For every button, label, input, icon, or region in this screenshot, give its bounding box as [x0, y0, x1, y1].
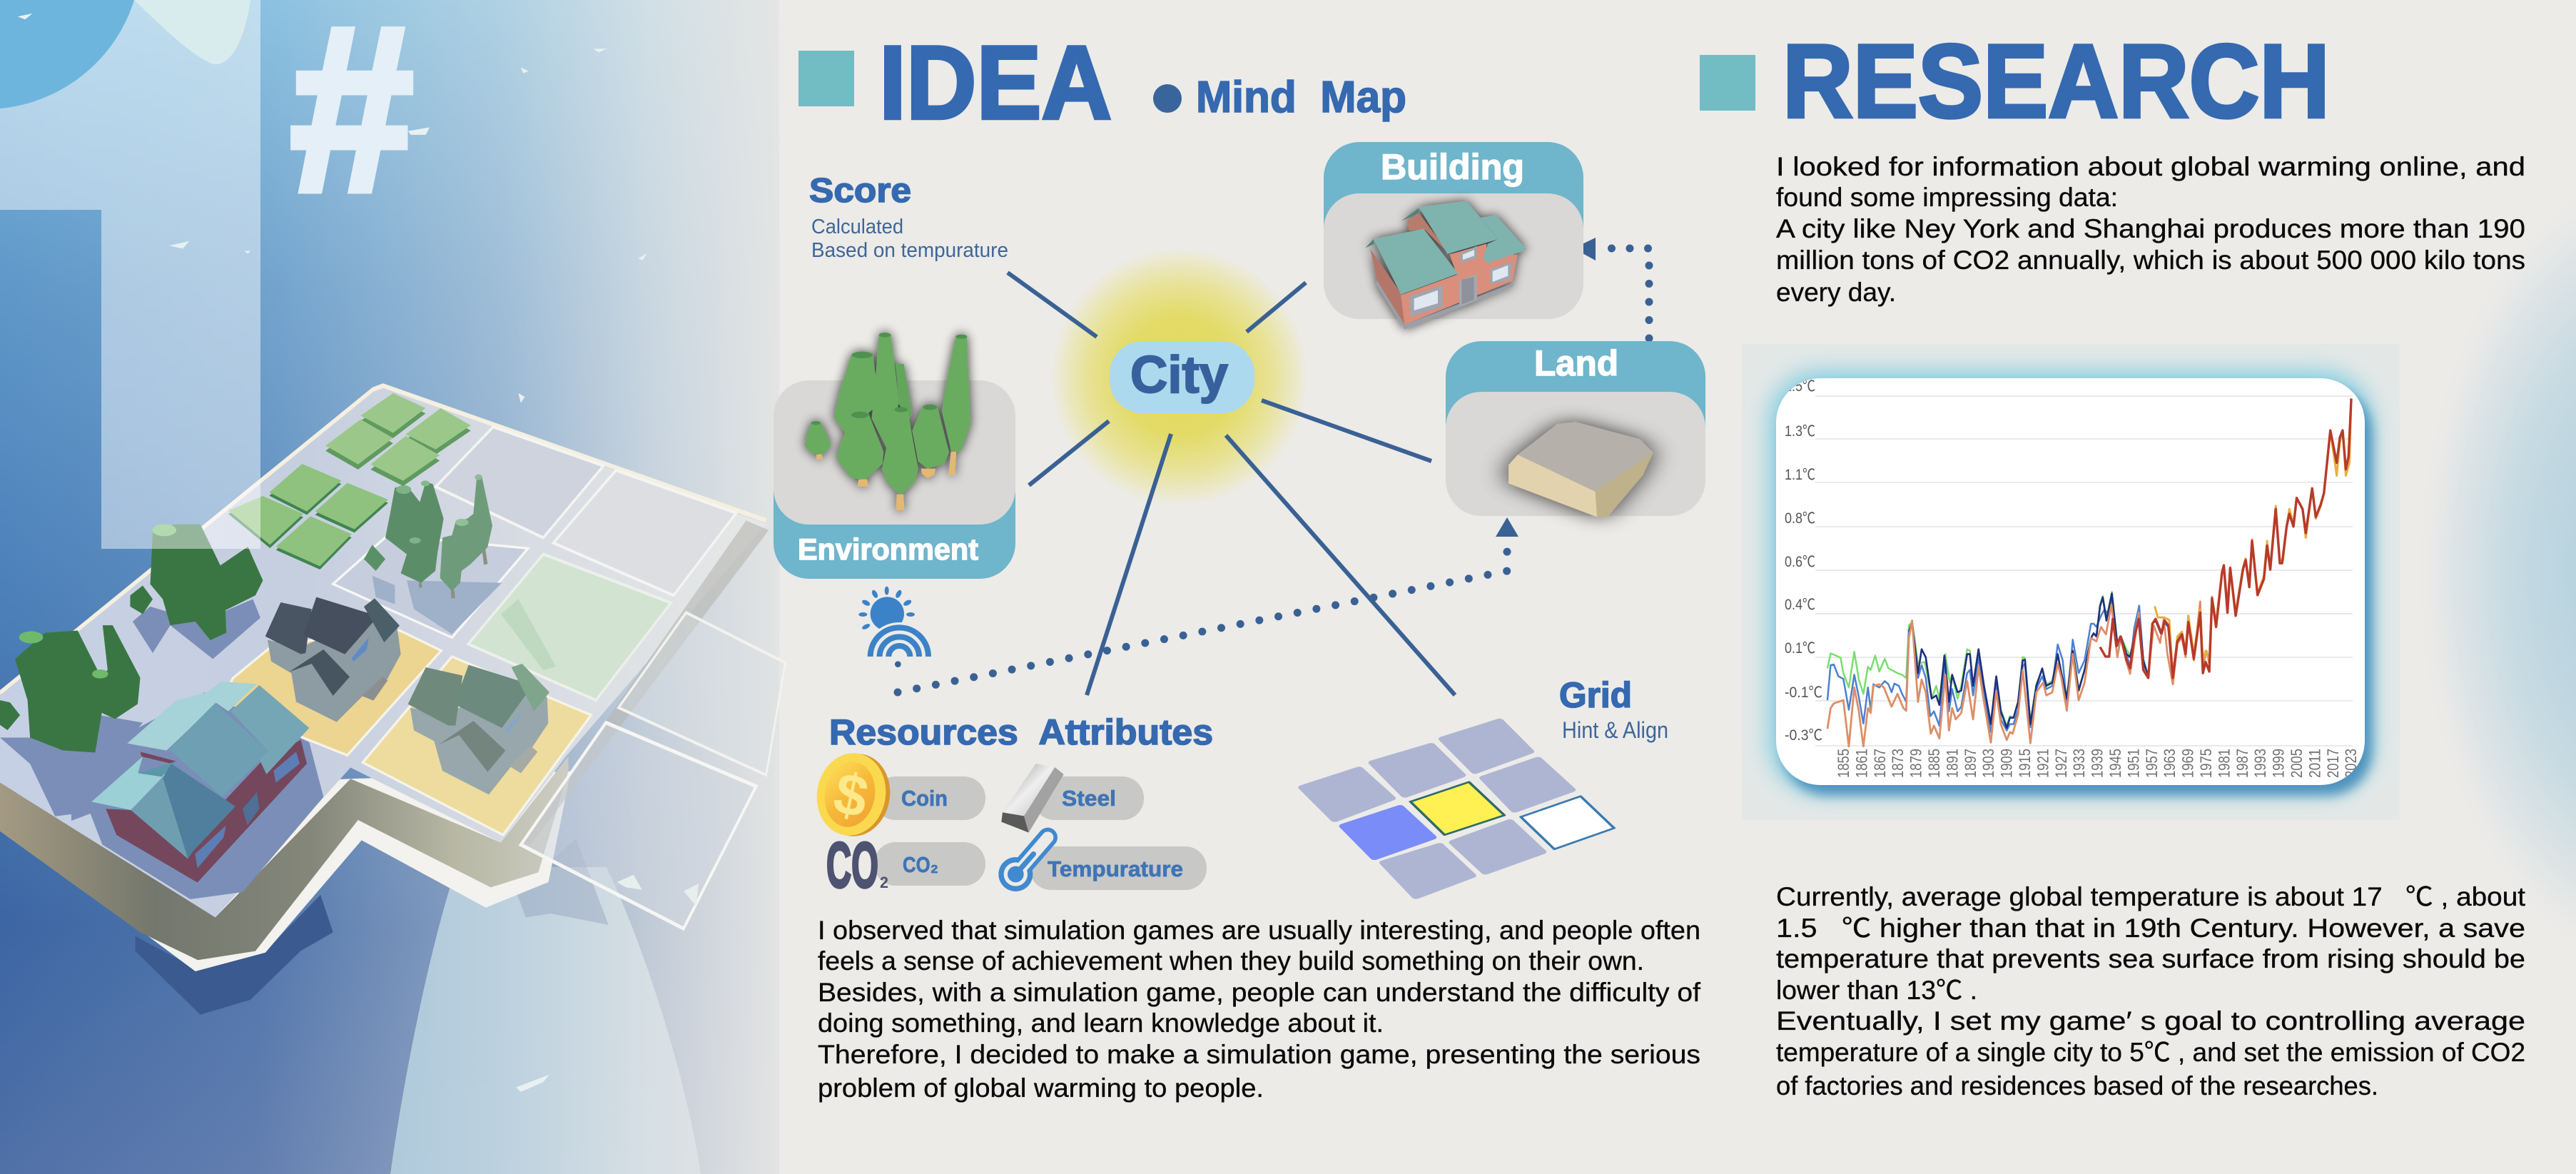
icon: CO2: CO [826, 830, 878, 901]
x axis labels: 1927 [2052, 749, 2070, 778]
text block: research intro: every day. [1776, 278, 1896, 307]
node: score: Score [809, 172, 911, 210]
temperature series [1827, 398, 2351, 747]
x axis labels: 2005 [2288, 749, 2306, 778]
x axis labels: 1939 [2089, 749, 2106, 778]
text block: research intro: found some impressing data: [1776, 183, 2118, 212]
pill: steel: Steel [1062, 786, 1116, 811]
text block: research intro: A city like Ney York and Shanghai produces more than 190 [1776, 214, 2525, 243]
x axis labels: 1903 [1979, 749, 1997, 778]
subheading: mind map: Mind Map [1196, 73, 1406, 122]
node: building: Building [1381, 147, 1524, 187]
x axis labels: 1897 [1962, 749, 1979, 778]
node: environment: Environment [798, 532, 978, 566]
node: grid: Hint & Align [1562, 717, 1668, 743]
y axis labels: 1.1℃ [1785, 467, 1815, 483]
upper farm plots [325, 393, 471, 486]
x axis labels: 1861 [1852, 749, 1870, 778]
pale house [408, 664, 549, 794]
text block: research conclusions: of factories and residences based of the researches. [1776, 1071, 2378, 1100]
middle trees [364, 475, 492, 598]
pill: steel [1033, 776, 1144, 820]
node: score: Based on tempurature [811, 239, 1008, 262]
pill: carbon dioxide [874, 842, 985, 886]
text block: research conclusions: 1.5 ℃ higher than that in 19th Century. However, a save [1776, 914, 2525, 943]
x axis labels: 1969 [2179, 749, 2197, 778]
heading: IDEA: IDEA [879, 24, 1112, 141]
text block: research conclusions: temperature that prevents sea surface from rising should be [1776, 944, 2525, 973]
node: building [1324, 142, 1583, 330]
text block: research conclusions: Eventually, I set my game′ s goal to controlling average [1776, 1006, 2525, 1036]
x axis labels: 1975 [2197, 749, 2215, 778]
island base [0, 385, 785, 1015]
x axis labels [1835, 749, 2360, 778]
dark house [265, 597, 401, 722]
heading: RESEARCH: RESEARCH [1783, 23, 2330, 139]
text block: idea description: problem of global warming to people. [818, 1073, 1264, 1103]
text block: research conclusions: Currently, average global temperature is about 17 ℃ , about [1776, 882, 2526, 911]
node: grid [1302, 675, 1668, 896]
mind map connector lines [1008, 273, 1455, 695]
icon: coin [811, 748, 896, 841]
y axis labels: 1.5℃ [1785, 378, 1815, 395]
x axis labels: 2011 [2306, 749, 2323, 778]
text block: idea description: Therefore, I decided to make a simulation game, presenting the serious [818, 1040, 1700, 1069]
x axis labels: 1957 [2143, 749, 2161, 778]
x axis labels: 1873 [1889, 749, 1907, 778]
x axis labels: 1933 [2070, 749, 2088, 778]
text block: research intro [1776, 152, 2525, 307]
y axis labels: 0.4℃ [1785, 597, 1815, 613]
x axis labels: 1885 [1925, 749, 1943, 778]
icon: thermometer [998, 837, 1048, 891]
text block: research intro: I looked for information about global warming online, and [1776, 152, 2525, 181]
x axis labels: 2017 [2324, 749, 2342, 778]
text block: idea description: I observed that simulation games are usually interesting, and people often [818, 916, 1700, 945]
node: resources attributes [811, 712, 1213, 901]
icon: house [1365, 201, 1527, 330]
icon: land block [1508, 422, 1653, 517]
icon: steel bar [1001, 764, 1064, 833]
icon: grid cells [1302, 721, 1614, 896]
city glow [1047, 244, 1312, 510]
x axis labels: 1879 [1907, 749, 1925, 778]
x axis labels: 1891 [1943, 749, 1961, 778]
dark green trees [0, 525, 263, 753]
y axis labels: 0.6℃ [1785, 554, 1815, 570]
x axis labels: 2023 [2342, 749, 2360, 778]
y axis labels: -0.3℃ [1785, 727, 1822, 744]
x axis labels: 1945 [2106, 749, 2124, 778]
city node [1110, 341, 1254, 413]
text block: idea description: feels a sense of achievement when they build something on their own. [818, 946, 1644, 976]
decorative blob on right edge [2412, 157, 2576, 985]
big numeral 1 [0, 0, 260, 549]
x axis labels: 1951 [2124, 749, 2142, 778]
icon: CO2 [826, 830, 888, 901]
pill: carbon dioxide: CO₂ [903, 852, 938, 877]
y axis labels: 0.8℃ [1785, 510, 1815, 527]
icon: trees [804, 333, 970, 510]
pill: temperature [1030, 846, 1207, 890]
x axis labels: 1993 [2251, 749, 2269, 778]
x axis labels: 1963 [2161, 749, 2179, 778]
tree shadows on ground [0, 715, 143, 816]
pill: coin: Coin [901, 786, 948, 811]
pill: temperature: Tempurature [1048, 856, 1183, 881]
y axis labels [1785, 378, 1822, 744]
x axis labels: 1999 [2270, 749, 2288, 778]
pill: coin [874, 776, 985, 820]
text block: idea description: Besides, with a simulation game, people can understand the difficulty of [818, 978, 1701, 1007]
x axis labels: 1921 [2034, 749, 2052, 778]
text block: research intro: million tons of CO2 annually, which is about 500 000 kilo tons [1776, 246, 2525, 275]
node: land [1446, 341, 1705, 517]
node: grid: Grid [1559, 675, 1632, 715]
icon: CO2: 2 [880, 874, 888, 891]
node: resources attributes: Resources Attributes [829, 712, 1213, 752]
node: environment [774, 333, 1015, 579]
x axis labels: 1855 [1835, 749, 1852, 778]
city node: City [1130, 346, 1228, 404]
blue roof house [71, 682, 323, 899]
x axis labels: 1981 [2215, 749, 2233, 778]
text block: idea description: doing something, and learn knowledge about it. [818, 1008, 1384, 1038]
text block: research conclusions: lower than 13℃ . [1776, 976, 1977, 1005]
y axis labels: 1.3℃ [1785, 423, 1815, 440]
chart: global temperature line chart [1742, 344, 2400, 820]
dotted arrow: resources to land [898, 517, 1518, 692]
icon: sun and rainbow [858, 587, 933, 691]
node: land: Land [1534, 343, 1618, 383]
y axis labels: 0.1℃ [1785, 640, 1815, 657]
x axis labels: 1909 [1998, 749, 2016, 778]
dotted arrow: land to building [1573, 238, 1649, 338]
text block: research conclusions [1776, 882, 2526, 1100]
grid lines [1815, 396, 2353, 746]
panel: game screenshot hero [0, 0, 785, 1174]
x axis labels: 1867 [1871, 749, 1889, 778]
yellow build plots, farms, houses [219, 464, 591, 835]
node: score: Calculated [811, 216, 903, 238]
x axis labels: 1987 [2233, 749, 2251, 778]
node: score [809, 172, 1008, 262]
text block: idea description [818, 916, 1701, 1103]
y axis labels: -0.1℃ [1785, 684, 1822, 701]
icon: coin: $ [828, 760, 873, 831]
x axis labels: 1915 [2016, 749, 2034, 778]
text block: research conclusions: temperature of a single city to 5℃ , and set the emission of CO2 [1776, 1038, 2525, 1067]
